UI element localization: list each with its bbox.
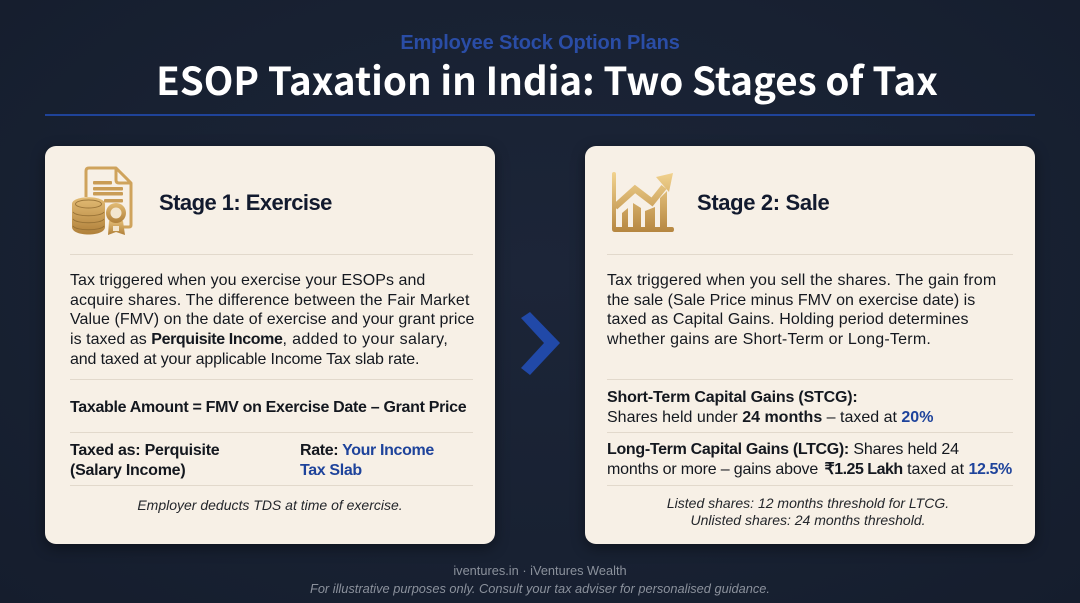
- text block: stage 2 description: taxed as Capital Gains. Holding period determines: [607, 311, 969, 328]
- LTCG: Long-Term Capital Gains (LTCG): Shares held 24: [607, 441, 959, 458]
- STCG: Short-Term Capital Gains (STCG):: [607, 389, 858, 406]
- footer: [310, 563, 770, 596]
- panel: stage 2 sale: [585, 146, 1035, 544]
- note: TDS: Employer deducts TDS at time of exercise.: [137, 497, 403, 513]
- text block: stage 1 description: [70, 272, 474, 368]
- text block: stage 1 description: and taxed at your applicable Income Tax slab rate.: [70, 350, 419, 368]
- text block: stage 1 description: Value (FMV) on the date of exercise and your grant price: [70, 311, 474, 328]
- icon: rising chart: [612, 172, 674, 232]
- STCG: Shares held under 24 months – taxed at 20%: [607, 408, 933, 426]
- text block: stage 2 description: whether gains are Short-Term or Long-Term.: [607, 331, 931, 348]
- STCG: [607, 389, 934, 426]
- text block: stage 1 description: acquire shares. The difference between the Fair Market: [70, 292, 470, 308]
- text block: stage 2 description: [607, 272, 996, 348]
- rate: Rate: Your Income: [300, 442, 434, 459]
- panel: stage 1 exercise: [45, 146, 495, 544]
- text block: stage 2 description: the sale (Sale Price minus FMV on exercise date) is: [607, 292, 975, 308]
- text block: stage 1 description: Tax triggered when you exercise your ESOPs and: [70, 272, 425, 289]
- heading: stage 1: Stage 1: Exercise: [159, 190, 332, 215]
- heading: stage 2: Stage 2: Sale: [697, 190, 829, 215]
- note: thresholds: [667, 495, 949, 528]
- footer: iventures.in · iVentures Wealth: [453, 563, 627, 578]
- text block: stage 1 description: is taxed as Perquisite Income, added to your salary,: [70, 331, 448, 348]
- LTCG: [607, 441, 1012, 478]
- title: ESOP Taxation in India: Two Stages of Tax: [156, 51, 938, 107]
- taxed as: [70, 442, 220, 478]
- taxed as: (Salary Income): [70, 462, 185, 478]
- subtitle: Employee Stock Option Plans: [400, 32, 680, 54]
- formula: Taxable Amount = FMV on Exercise Date – Grant Price: [70, 399, 466, 416]
- footer: For illustrative purposes only. Consult your tax adviser for personalised guidance.: [310, 580, 770, 596]
- note: thresholds: Listed shares: 12 months threshold for LTCG.: [667, 495, 949, 511]
- taxed as: Taxed as: Perquisite: [70, 442, 219, 459]
- arrow: stage 1 to stage 2: [521, 312, 560, 375]
- LTCG: months or more – gains above ₹1.25 Lakh taxed at 12.5%: [607, 460, 1012, 478]
- icon: document with coins and medal: [72, 166, 132, 235]
- rate: Tax Slab: [300, 462, 362, 478]
- rate: [300, 442, 434, 478]
- header rule: [45, 114, 1035, 116]
- text block: stage 2 description: Tax triggered when you sell the shares. The gain from: [607, 272, 996, 289]
- note: thresholds: Unlisted shares: 24 months threshold.: [690, 512, 926, 528]
